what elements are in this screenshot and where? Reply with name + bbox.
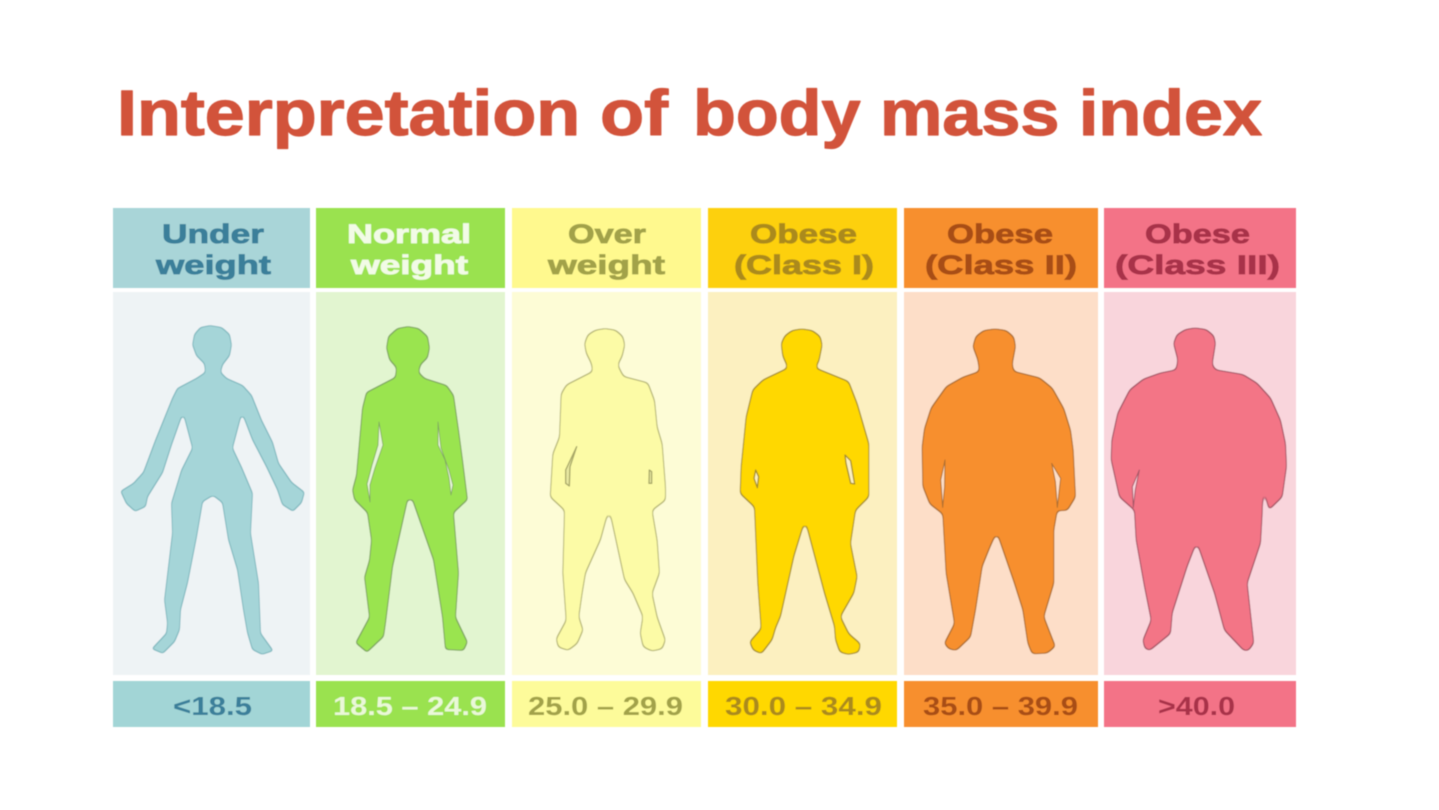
header: obese class III: (Class III) xyxy=(1115,250,1280,280)
panel: obese class I xyxy=(708,208,897,727)
range: overweight xyxy=(512,681,701,727)
header: obese class I: Obese xyxy=(750,219,857,249)
range: obese class II xyxy=(904,681,1098,727)
header: underweight: weight xyxy=(155,250,271,280)
header: underweight: Under xyxy=(162,219,265,249)
slit: left side xyxy=(1132,470,1139,507)
range: obese class I: 30.0 – 34.9 xyxy=(725,691,882,721)
slit: left side xyxy=(754,470,759,488)
slit: left side xyxy=(941,460,945,507)
figure: underweight xyxy=(120,325,305,655)
header: obese class I: (Class I) xyxy=(734,250,874,280)
range: normal weight: 18.5 – 24.9 xyxy=(333,691,487,721)
range: underweight: <18.5 xyxy=(173,691,252,721)
header: normal weight xyxy=(316,208,505,288)
header: normal weight: Normal xyxy=(347,219,471,249)
panel: underweight xyxy=(113,208,310,727)
range: obese class III: >40.0 xyxy=(1158,691,1235,721)
panel: normal weight xyxy=(316,208,505,727)
figure: obese class III xyxy=(1111,327,1287,651)
panel: obese class III xyxy=(1104,208,1296,727)
figure: normal weight xyxy=(352,326,468,653)
figure: obese class I xyxy=(740,328,869,655)
header: obese class III xyxy=(1104,208,1296,288)
slit: right side xyxy=(1052,463,1061,507)
slit: right side xyxy=(649,470,652,483)
figure: obese class II xyxy=(922,328,1076,654)
header: obese class II: (Class II) xyxy=(925,250,1077,280)
header: normal weight: weight xyxy=(350,250,468,280)
figure: overweight xyxy=(550,328,666,652)
title: body mass index xyxy=(693,77,1262,149)
range: overweight: 25.0 – 29.9 xyxy=(528,691,683,721)
panel: overweight xyxy=(512,208,701,727)
range: obese class II: 35.0 – 39.9 xyxy=(923,691,1078,721)
title xyxy=(117,77,1262,149)
header: obese class II: Obese xyxy=(947,219,1053,249)
header: obese class I xyxy=(708,208,897,288)
header: overweight: Over xyxy=(568,219,647,249)
panel: obese class II xyxy=(904,208,1098,727)
title: Interpretation of xyxy=(117,77,669,149)
header: overweight xyxy=(512,208,701,288)
range: obese class I xyxy=(708,681,897,727)
range: underweight xyxy=(113,681,310,727)
header: obese class III: Obese xyxy=(1145,219,1250,249)
slit: left side xyxy=(566,447,577,486)
header: overweight: weight xyxy=(547,250,665,280)
range: obese class III xyxy=(1104,681,1296,727)
slit: right side xyxy=(845,455,855,484)
slit: right arm xyxy=(438,422,453,495)
range: normal weight xyxy=(316,681,505,727)
header: underweight xyxy=(113,208,310,288)
slit: left arm xyxy=(367,422,383,502)
header: obese class II xyxy=(904,208,1098,288)
